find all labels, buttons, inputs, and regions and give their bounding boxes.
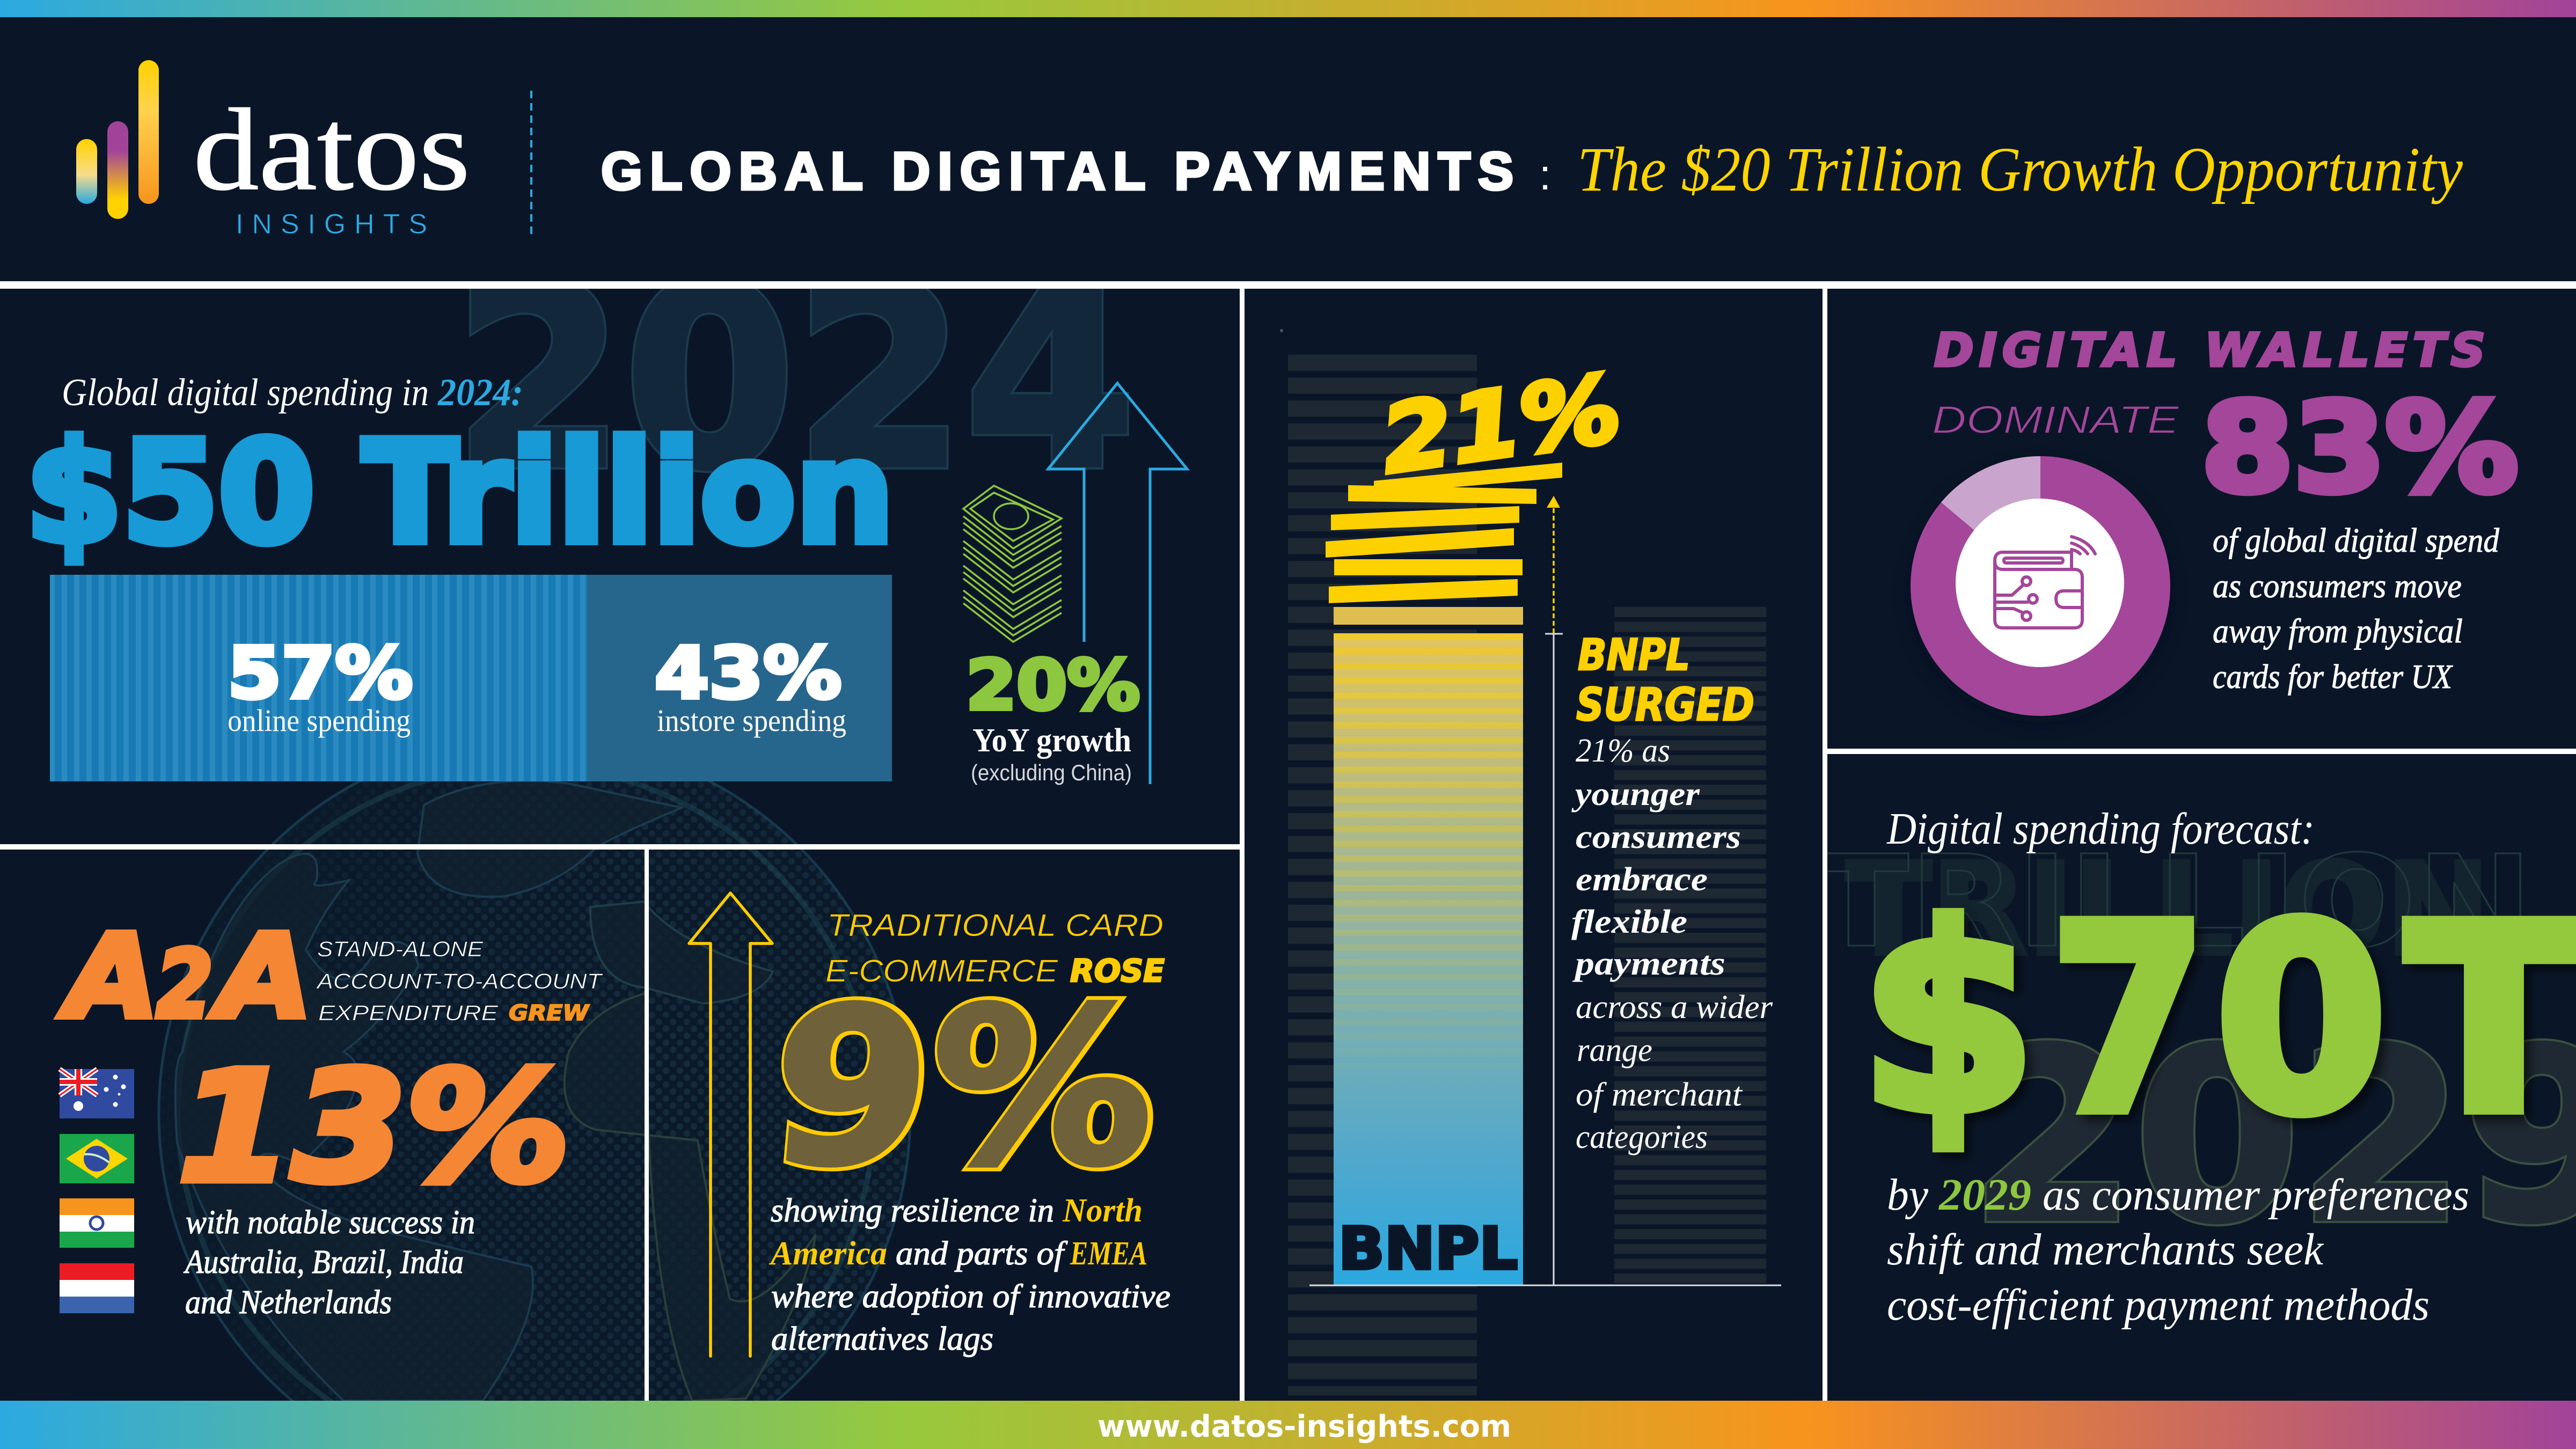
A2A description: EXPENDITURE <box>318 1001 499 1025</box>
logo bars <box>76 60 159 219</box>
57% online: 57% <box>228 632 413 715</box>
card body: showing resilience in <box>771 1192 1054 1229</box>
donut chart <box>1911 456 2170 722</box>
flag: India <box>60 1198 134 1248</box>
$50 Trillion: $50 Trillion <box>26 412 894 574</box>
9%: 9% <box>762 963 1166 1213</box>
wallets body: away from physical <box>2213 612 2463 650</box>
BNPL body: categories <box>1576 1119 1708 1155</box>
watermark 2024: 2024 <box>454 231 1136 524</box>
dominate: DOMINATE <box>1932 399 2179 442</box>
flag: Netherlands <box>60 1263 134 1313</box>
wallets body: as consumers move <box>2213 567 2462 605</box>
BNPL bar <box>1334 633 1523 1285</box>
A2A body: Australia, Brazil, India <box>183 1244 464 1280</box>
panel: 2024 spending <box>32 289 1190 785</box>
83%: 83% <box>2201 377 2518 519</box>
wallets body: of global digital spend <box>2213 521 2500 559</box>
20% growth <box>966 646 1140 785</box>
card body: and parts of <box>896 1235 1068 1272</box>
A2A mark: 2 <box>157 931 213 1038</box>
card body: where adoption of innovative <box>771 1278 1170 1315</box>
BNPL body: range <box>1577 1032 1652 1069</box>
panel: forecast <box>1814 804 2576 1330</box>
BNPL body <box>1571 733 1773 1155</box>
header divider <box>530 91 532 236</box>
forecast body: 2029 <box>1938 1170 2031 1220</box>
background stripes left <box>1288 355 1477 1395</box>
title <box>601 134 2463 204</box>
card heading: E-COMMERCE <box>825 954 1058 989</box>
BNPL heading: BNPL <box>1578 630 1690 680</box>
footer url: www.datos-insights.com <box>1097 1409 1511 1444</box>
title colon: : <box>1539 151 1551 199</box>
A2A mark <box>58 910 312 1044</box>
panel divider lines <box>0 281 2576 1401</box>
watermark 2029 <box>1985 1038 2576 1227</box>
forecast body: shift and merchants seek <box>1887 1225 2324 1275</box>
forecast body: as consumer preferences <box>2043 1170 2469 1220</box>
wallets body: cards for better UX <box>2213 657 2454 696</box>
title subtitle: The $20 Trillion Growth Opportunity <box>1577 134 2463 204</box>
A2A description: GREW <box>509 1001 590 1026</box>
21%: 21% <box>1375 354 1627 494</box>
BNPL body: across a wider <box>1576 989 1773 1026</box>
forecast body <box>1887 1170 2469 1330</box>
growth marker arrow <box>1545 496 1563 1285</box>
baseline <box>1309 1285 1781 1286</box>
A2A description <box>316 938 603 1026</box>
card body: America <box>769 1235 887 1272</box>
card heading: TRADITIONAL CARD <box>827 908 1163 943</box>
flag: Brazil <box>60 1134 134 1183</box>
forecast body: by <box>1887 1170 1929 1220</box>
card body: EMEA <box>1070 1235 1147 1272</box>
20% growth: 20% <box>966 646 1140 726</box>
BNPL body: of merchant <box>1576 1077 1743 1113</box>
A2A body <box>183 1204 475 1321</box>
BNPL body: 21% as <box>1576 733 1670 769</box>
A2A mark: A <box>210 910 312 1044</box>
arrow: yellow up <box>689 893 772 1356</box>
watermark TRILLION: TRILLION <box>1814 828 2533 976</box>
icon: digital wallet <box>1995 537 2095 628</box>
panel: traditional card e-commerce <box>689 893 1170 1357</box>
BNPL body: younger <box>1571 776 1700 813</box>
panel: BNPL <box>1280 329 1781 1395</box>
stacked slats <box>1326 463 1562 625</box>
watermark 2024: 2024 <box>454 231 1136 524</box>
A2A description: ACCOUNT-TO-ACCOUNT <box>316 970 603 993</box>
$70T: $ <box>1860 870 2036 1169</box>
20% growth: YoY growth <box>972 722 1131 759</box>
$70T <box>1874 908 2576 1160</box>
43% instore: 43% <box>655 632 841 715</box>
arrow: blue up <box>1048 383 1187 784</box>
watermark TRILLION: TRILLION <box>1846 836 2490 984</box>
card heading <box>825 908 1165 989</box>
watermark 2024 <box>469 289 1129 473</box>
A2A body: with notable success in <box>186 1204 475 1241</box>
logo wordmark: datos <box>193 85 470 215</box>
BNPL bar label: BNPL <box>1338 1216 1518 1283</box>
panel: A2A <box>58 910 603 1321</box>
BNPL body: flexible <box>1571 904 1687 940</box>
BNPL heading <box>1576 630 1754 731</box>
43% instore <box>655 632 846 738</box>
wallets body <box>2213 521 2500 696</box>
top gradient bar <box>0 0 2576 17</box>
logo subtitle: INSIGHTS <box>236 209 427 240</box>
43% instore: instore spending <box>657 703 846 738</box>
BNPL heading: SURGED <box>1576 678 1754 731</box>
footer gradient bar <box>0 1401 2576 1449</box>
card body <box>769 1192 1170 1357</box>
panel: digital wallets <box>1911 324 2518 722</box>
13%: 13% <box>178 1039 570 1216</box>
background globe <box>158 781 911 1401</box>
small mark <box>1280 329 1283 332</box>
BNPL body: embrace <box>1576 861 1708 898</box>
57% online: online spending <box>228 703 411 738</box>
BNPL body: consumers <box>1576 819 1741 855</box>
$70T: 0 <box>2215 870 2387 1169</box>
split bar <box>50 575 892 781</box>
card heading: ROSE <box>1070 953 1165 989</box>
forecast heading: Digital spending forecast: <box>1886 804 2315 854</box>
card body: alternatives lags <box>771 1321 993 1357</box>
BNPL body: payments <box>1572 946 1725 982</box>
20% growth: (excluding China) <box>971 760 1132 785</box>
flag: Australia <box>60 1069 134 1118</box>
background stripes right <box>1614 607 1766 1283</box>
subheading: Global digital spending in <box>62 371 429 414</box>
subheading: 2024: <box>437 371 523 414</box>
card body: North <box>1062 1192 1143 1229</box>
watermark TRILLION <box>1827 851 2521 956</box>
icon: money stack <box>963 486 1062 642</box>
A2A description: STAND-ALONE <box>317 938 484 961</box>
A2A mark: A <box>58 910 159 1044</box>
A2A body: and Netherlands <box>185 1284 392 1321</box>
9%: 9% <box>763 963 1167 1213</box>
forecast body: cost-efficient payment methods <box>1887 1280 2429 1330</box>
title main: GLOBAL DIGITAL PAYMENTS <box>601 141 1513 201</box>
$70T: 7 <box>2050 870 2207 1169</box>
logo: datos insights <box>76 60 470 240</box>
wallets heading: DIGITAL WALLETS <box>1934 324 2491 377</box>
